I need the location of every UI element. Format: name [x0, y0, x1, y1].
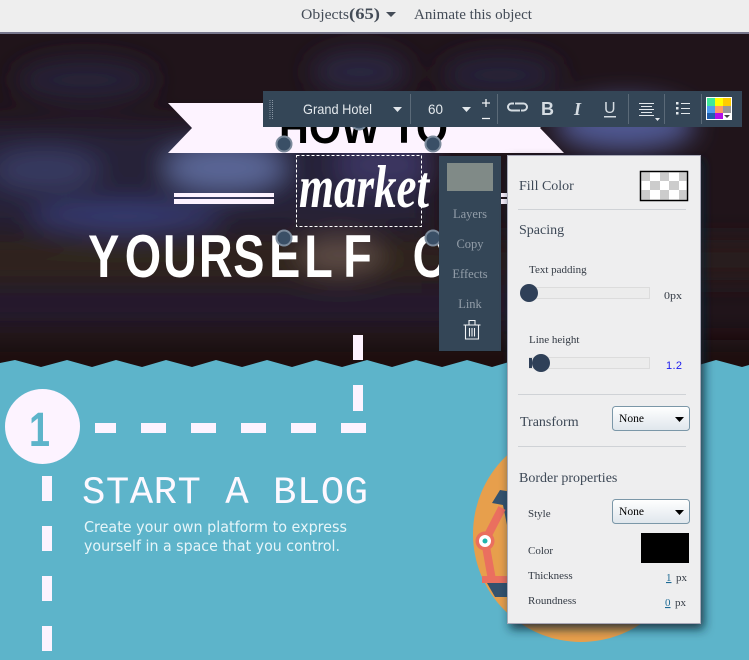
- line height slider: [529, 334, 682, 372]
- roundness row: 0: [665, 597, 671, 609]
- step 1 badge: [5, 389, 80, 464]
- icon: trash: [464, 320, 480, 339]
- hero photo background: [0, 34, 749, 390]
- roundness row: [528, 595, 686, 609]
- line height slider: 1.2: [666, 360, 682, 372]
- transform row: Transform: [520, 415, 579, 430]
- step description: [84, 518, 347, 555]
- objects menu: (65): [349, 6, 380, 23]
- underline button: U: [604, 100, 616, 117]
- border colour row: Color: [528, 545, 553, 557]
- align icon: [639, 104, 660, 121]
- roundness row: px: [675, 597, 686, 609]
- dashed path: [42, 335, 366, 651]
- list icon: [676, 102, 690, 114]
- font size: [428, 99, 490, 118]
- objects menu: Objects: [301, 7, 349, 23]
- resize handles: [276, 114, 440, 246]
- step description: Create your own platform to express: [84, 518, 347, 536]
- fill colour row: [519, 172, 688, 200]
- side action menu: Layers: [453, 207, 487, 221]
- top bar: [0, 0, 749, 34]
- transform row: [520, 406, 690, 430]
- blog illustration: [473, 426, 689, 642]
- thickness row: [528, 570, 688, 584]
- italic button: I: [573, 99, 582, 119]
- step heading: START A BLOG: [82, 471, 368, 515]
- thickness row: Thickness: [528, 570, 573, 582]
- heading: how to: HOW TO: [279, 101, 448, 153]
- formatting toolbar: [263, 91, 742, 127]
- font family: Grand Hotel: [303, 101, 372, 117]
- text padding slider: 0px: [664, 290, 683, 302]
- border style row: [528, 500, 690, 524]
- side action menu: [439, 156, 501, 351]
- side action menu: Link: [458, 297, 483, 311]
- spacing heading: Spacing: [519, 223, 564, 238]
- double rules: [174, 193, 509, 204]
- teal section with zigzag edge: [0, 360, 749, 660]
- text padding slider: Text padding: [529, 264, 587, 276]
- font size: 60: [428, 101, 443, 117]
- link icon: [508, 104, 527, 110]
- heading: market: market: [299, 154, 431, 220]
- side action menu: Copy: [456, 237, 484, 251]
- transform row: None: [619, 411, 644, 425]
- objects menu: [301, 6, 396, 23]
- text padding slider: [520, 264, 683, 302]
- bold button: B: [541, 99, 554, 119]
- grip: [270, 100, 272, 120]
- step 1 badge: 1: [29, 404, 50, 457]
- heading: yourself online: YOURSELF O: [88, 223, 449, 290]
- border style row: None: [619, 504, 644, 518]
- thickness row: px: [676, 572, 688, 584]
- border properties heading: Border properties: [519, 471, 617, 486]
- properties panel: [508, 156, 700, 624]
- preview swatch: [447, 163, 493, 191]
- colour palette: [706, 97, 732, 120]
- line height slider: Line height: [529, 334, 579, 346]
- thickness row: 1: [666, 572, 672, 584]
- animate link: Animate this object: [414, 7, 532, 23]
- fill colour row: Fill Color: [519, 179, 574, 194]
- roundness row: Roundness: [528, 595, 576, 607]
- title ribbon: [168, 101, 564, 153]
- step description: yourself in a space that you control.: [84, 537, 340, 555]
- text selection box: [296, 156, 422, 226]
- border style row: Style: [528, 508, 551, 520]
- side action menu: Effects: [452, 267, 488, 281]
- border colour row: [528, 533, 689, 563]
